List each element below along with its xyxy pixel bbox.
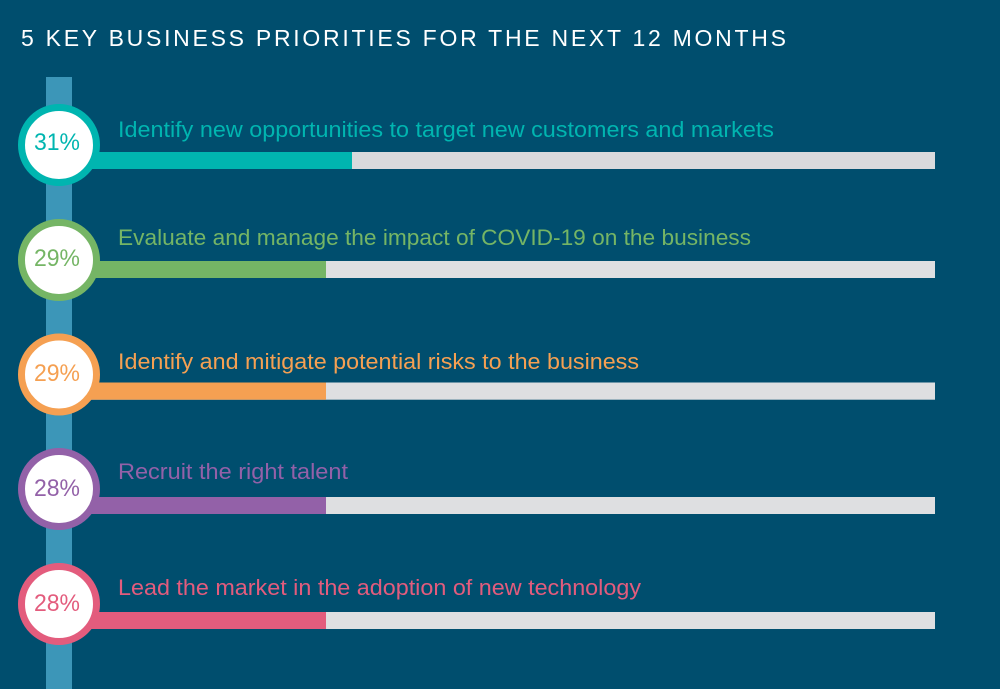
priority 5 percentage: 28%: [34, 590, 80, 617]
priority 5 bar track: [90, 612, 935, 629]
priority 1 percentage: 31%: [34, 129, 80, 156]
priority 1 bar track: [90, 152, 935, 169]
priority 3 percentage: 29%: [34, 360, 80, 387]
priority 4 bar track: [90, 497, 935, 514]
priority 1 label: Identify new opportunities to target new customers and markets: [118, 117, 774, 142]
priority 4 bar fill: [90, 497, 326, 514]
vertical timeline bar: [46, 77, 72, 689]
priority 1: new customers and markets: [22, 108, 935, 182]
priority 1 bar fill: [90, 152, 352, 169]
priority 3: potential risks: [22, 337, 935, 412]
priority 3 circle: [22, 337, 96, 412]
priority 2: COVID-19 impact: [22, 222, 935, 298]
priority 4 percentage: 28%: [34, 475, 80, 502]
priority 5 circle: [22, 566, 96, 642]
priority 5 label: Lead the market in the adoption of new technology: [118, 575, 642, 600]
priority 3 label: Identify and mitigate potential risks to the business: [118, 349, 639, 374]
priority 5 bar fill: [90, 612, 326, 629]
title: 5 KEY BUSINESS PRIORITIES FOR THE NEXT 12 MONTHS: [21, 25, 786, 51]
priority 4 circle: [22, 452, 96, 526]
priority 2 label: Evaluate and manage the impact of COVID-19 on the business: [118, 225, 751, 250]
priority 2 bar fill: [90, 261, 326, 278]
priority 5: new technology: [22, 566, 935, 642]
priority 1 circle: [22, 108, 96, 182]
priority 2 bar track: [90, 261, 935, 278]
priority 2 percentage: 29%: [34, 245, 80, 272]
priority 3 bar fill: [90, 382, 326, 400]
priority 4: right talent: [22, 452, 935, 526]
priority 3 bar track: [90, 382, 935, 400]
priority 2 circle: [22, 222, 96, 298]
priority 4 label: Recruit the right talent: [118, 459, 349, 484]
